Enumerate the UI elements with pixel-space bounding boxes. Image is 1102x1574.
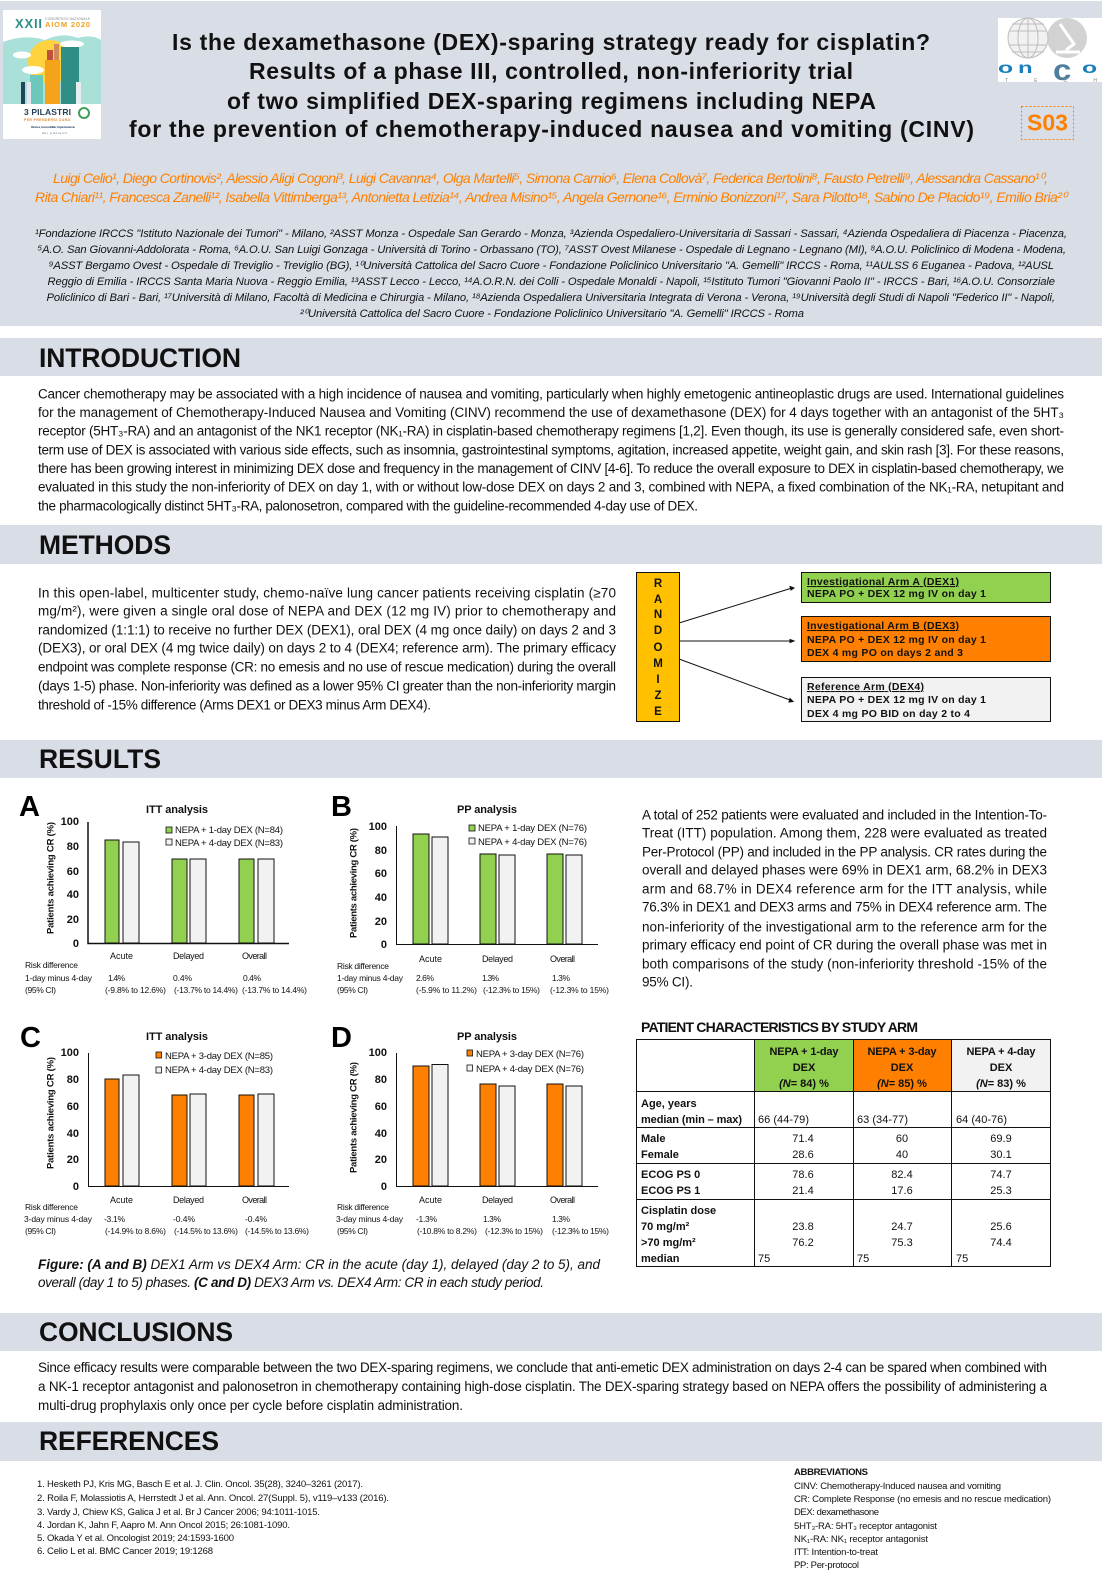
text: conclusions: multi-drug prophylaxis only once per cycle before cisplatin administration. <box>38 1398 463 1413</box>
affiliations: ²⁰Università Cattolica del Sacro Cuore - Fondazione Policlinico Universitario "A. Gemelli" IRCCS - Roma <box>300 308 804 320</box>
badge: S03 <box>1022 106 1074 140</box>
table: patient characteristics: NEPA + 1-day <box>770 1046 839 1058</box>
chart A: 1-day minus 4-day <box>25 973 93 983</box>
logo: Oncotech: T E C H <box>1005 78 1097 84</box>
chart C: -0.4% <box>245 1214 267 1224</box>
authors <box>35 170 1069 205</box>
chart A: (-13.7% to 14.4%) <box>174 985 238 995</box>
affiliations: Policlinico di Bari - Bari, ¹⁷Università di Milano, Facoltà di Medicina e Chirurgia - Milano, ¹⁸Azienda Ospedaliera Universitaria Integrata di Verona - Verona, ¹⁹Università degli Studi di Napoli "Federico II" - Napoli, <box>46 292 1055 304</box>
chart B: (95% CI) <box>337 985 368 995</box>
badge: S03: S03 <box>1027 110 1068 136</box>
box: randomize: A <box>654 594 662 606</box>
title: for the prevention of chemotherapy-induced nausea and vomiting (CINV) <box>129 116 974 142</box>
box: reference arm: DEX 4 mg PO BID on day 2 to 4 <box>807 708 970 720</box>
text: references <box>37 1479 389 1557</box>
table: patient characteristics: Cisplatin dose <box>641 1205 716 1217</box>
chart C: 3-day minus 4-day <box>24 1214 93 1224</box>
chart B: 100 <box>369 821 387 833</box>
chart A: 0.4% <box>243 973 261 983</box>
text: conclusions: a NK-1 receptor antagonist and palonosetron in chemotherapy containing high-dose cisplatin. The DEX-sparing strategy based on NEPA offers the possibility of administering a <box>38 1379 1047 1394</box>
chart D: Overall <box>550 1195 575 1205</box>
table: patient characteristics: 75 <box>857 1253 869 1265</box>
heading: introduction <box>0 338 1102 376</box>
chart A: Acute <box>110 951 133 961</box>
chart D: Patients achieving CR (%) <box>348 1062 360 1173</box>
chart C: 80 <box>67 1074 79 1086</box>
text: references: 3. Vardy J, Chiew KS, Galica J et al. Br J Cancer 2006; 94:1011-1015. <box>37 1507 320 1518</box>
chart D: D <box>331 1022 352 1054</box>
table: patient characteristics: >70 mg/m² <box>641 1237 696 1249</box>
chart A: Patients achieving CR (%) <box>46 822 56 934</box>
chart C: NEPA + 4-day DEX (N=83) <box>165 1065 273 1076</box>
text: references: 2. Roila F, Molassiotis A, Herrstedt J et al. Ann. Oncol. 27(Suppl. 5), v119–v133 (2016). <box>37 1493 389 1504</box>
heading: methods <box>0 525 1102 564</box>
table: patient characteristics: 70 mg/m² <box>641 1221 690 1233</box>
box: randomize: I <box>656 674 660 686</box>
authors: Rita Chiari¹¹, Francesca Zanelli¹², Isabella Vittimberga¹³, Antonietta Letizia¹⁴, Andrea Misino¹⁵, Angela Gernone¹⁶, Erminio Bonizzoni¹⁷, Sara Pilotto¹⁸, Sabino De Placido¹⁹, Emilio Bria²⁰ <box>35 189 1069 205</box>
table: patient characteristics: 75 <box>956 1253 968 1265</box>
chart D: (-12.3% to 15%) <box>552 1226 609 1236</box>
chart A: 100 <box>61 816 79 828</box>
text: methods: mg/m²), were given a single oral dose of NEPA and DEX (12 mg IV) prior to chemotherapy and <box>38 604 616 618</box>
chart B: PP analysis <box>457 804 517 816</box>
box: investigational arm B: DEX 4 mg PO on days 2 and 3 <box>807 647 963 659</box>
text: introduction: the pharmacologically distinct 5HT₃-RA, palonosetron, compared with the guideline-recommended 4-day use of DEX. <box>38 498 698 514</box>
box: randomize: O <box>654 642 663 654</box>
affiliations: ¹Fondazione IRCCS "Istituto Nazionale dei Tumori" - Milano, ²ASST Monza - Ospedale San Gerardo - Monza, ³Azienda Ospedaliero-Universitaria di Sassari - Sassari, ⁴Azienda Ospedaliera di Piacenza - Piacenza, <box>35 228 1067 240</box>
text: results: both comparisons of the study (non-inferiority threshold -15% of the <box>642 956 1047 972</box>
logo: AIOM 2020 congress: CONGRESSO NAZIONALE <box>45 17 91 21</box>
chart D: 100 <box>369 1047 387 1059</box>
chart C <box>20 1022 309 1236</box>
text: abbreviations: CINV: Chemotherapy-Induced nausea and vomiting <box>794 1481 1001 1492</box>
arrows: randomization <box>679 586 794 702</box>
text: abbreviations: PP: Per-protocol <box>794 1560 859 1571</box>
table: patient characteristics: 23.8 <box>792 1221 814 1233</box>
table: patient characteristics: 17.6 <box>891 1185 913 1197</box>
table: patient characteristics: 71.4 <box>792 1133 814 1145</box>
chart B: (-5.9% to 11.2%) <box>416 985 477 995</box>
logo: AIOM 2020 congress: Ricerca, Accessibilità, Organizzazione <box>31 125 75 129</box>
table: patient characteristics: 21.4 <box>792 1185 814 1197</box>
logo: Oncotech: o <box>998 59 1013 77</box>
chart A: 0.4% <box>173 973 192 983</box>
chart B: Acute <box>419 954 442 964</box>
logo: Oncotech: o <box>1082 59 1097 77</box>
affiliations: Reggio di Emilia - IRCCS Santa Maria Nuova - Reggio Emilia, ¹³ASST Lecco - Lecco, ¹⁴A.O.R.N. dei Colli - Ospedale Monaldi - Napoli, ¹⁵Istituto Tumori "Giovanni Paolo II" - IRCCS - Bari, ¹⁶A.O.U. Consorziale <box>48 276 1055 288</box>
table: patient characteristics: Female <box>641 1149 679 1161</box>
chart C: C <box>20 1022 41 1054</box>
chart B: 80 <box>375 845 387 857</box>
table: patient characteristics: Male <box>641 1133 665 1145</box>
chart A: 0 <box>73 938 79 950</box>
text: introduction: receptor (5HT₃-RA) and an antagonist of the NK1 receptor (NK₁-RA) in cisplatin-based chemotherapy regimens [1,2]. Even though, its use is generally considered safe, even short- <box>38 424 1064 438</box>
chart C: Acute <box>110 1195 133 1205</box>
chart C: 100 <box>61 1047 79 1059</box>
table: patient characteristics: ECOG PS 0 <box>641 1169 700 1181</box>
chart C: Delayed <box>173 1195 204 1205</box>
chart D: (-12.3% to 15%) <box>485 1226 543 1236</box>
chart D: 0 <box>381 1181 387 1193</box>
table: patient characteristics: DEX <box>990 1062 1013 1074</box>
table: patient characteristics: NEPA + 4-day <box>966 1046 1036 1058</box>
box: randomize: Z <box>654 690 662 702</box>
text: abbreviations: CR: Complete Response (no emesis and no rescue medication) <box>794 1494 1051 1505</box>
text: abbreviations: ITT: Intention-to-treat <box>794 1547 878 1558</box>
text: abbreviations <box>794 1467 1051 1571</box>
chart C: Patients achieving CR (%) <box>46 1057 56 1169</box>
text: results: 95% CI). <box>642 974 693 990</box>
table: patient characteristics: 69.9 <box>990 1133 1012 1145</box>
chart D: 1.3% <box>552 1214 570 1224</box>
table: patient characteristics: 75 <box>758 1253 770 1265</box>
chart A: 60 <box>67 866 79 878</box>
chart A: A <box>19 791 40 823</box>
title <box>129 29 974 142</box>
text: abbreviations: NK₁-RA: NK₁ receptor antagonist <box>794 1534 928 1545</box>
chart A: NEPA + 4-day DEX (N=83) <box>175 838 283 849</box>
chart C: Risk difference <box>25 1202 78 1212</box>
logo: AIOM 2020 congress: 3 PILASTRI <box>24 107 71 117</box>
box: investigational arm A: Investigational Arm A (DEX1) <box>807 576 959 588</box>
text: results: Treat (ITT) population. Among them, 228 were evaluated as treated <box>642 826 1047 840</box>
logo: AIOM 2020 congress: PER PRENDERSI CURA <box>24 118 70 122</box>
chart B: Patients achieving CR (%) <box>348 828 360 938</box>
text: abbreviations: ABBREVIATIONS <box>794 1467 868 1478</box>
chart C: (-14.9% to 8.6%) <box>105 1226 166 1236</box>
chart B: 40 <box>375 892 387 904</box>
chart D: NEPA + 4-day DEX (N=76) <box>476 1064 584 1075</box>
chart A: 80 <box>67 841 79 853</box>
box: investigational arm B: Investigational Arm B (DEX3) <box>807 620 959 632</box>
text: references: 6. Celio L et al. BMC Cancer 2019; 19:1268 <box>37 1546 213 1557</box>
text: abbreviations: DEX: dexamethasone <box>794 1507 879 1518</box>
table: patient characteristics: 25.3 <box>990 1185 1012 1197</box>
table: patient characteristics: 76.2 <box>792 1237 814 1249</box>
box: investigational arm B <box>802 616 1050 662</box>
panel: header <box>0 1 1102 326</box>
heading: conclusions: CONCLUSIONS <box>39 1317 233 1347</box>
chart D: NEPA + 3-day DEX (N=76) <box>476 1049 584 1060</box>
table: patient characteristics: median <box>641 1253 680 1265</box>
logo: AIOM 2020 congress <box>3 10 101 139</box>
chart B: 1.3% <box>552 973 570 983</box>
chart D: -1.3% <box>416 1214 437 1224</box>
heading: references: REFERENCES <box>39 1426 219 1456</box>
chart B: Overall <box>550 954 575 964</box>
table: patient characteristics: 66 (44-79) <box>758 1114 809 1126</box>
table: patient characteristics: (N= 84) % <box>779 1078 829 1090</box>
chart B: 2.6% <box>416 973 434 983</box>
chart B: 1.3% <box>482 973 499 983</box>
figure caption <box>38 1257 600 1290</box>
chart C: -0.4% <box>173 1214 195 1224</box>
text: conclusions <box>38 1360 1047 1413</box>
text: methods: (days 1-5) phase. Non-inferiority was defined as a lower 95% CI greater than the non-inferiority margin <box>38 678 616 694</box>
table: patient characteristics: 63 (34-77) <box>857 1114 908 1126</box>
chart B: Risk difference <box>337 961 389 971</box>
text: methods: (DEX3), or oral DEX (4 mg twice daily) on days 2 to 4 (DEX4; reference arm). The primary efficacy <box>38 640 616 656</box>
box: reference arm: NEPA PO + DEX 12 mg IV on day 1 <box>807 694 986 706</box>
affiliations: ⁹ASST Bergamo Ovest - Ospedale di Treviglio - Treviglio (BG), ¹⁰Università Cattolica del Sacro Cuore - Fondazione Policlinico Universitario "A. Gemelli" IRCCS - Roma, ¹¹AULSS 6 Euganea - Padova, ¹²AUSL <box>48 260 1054 272</box>
logo: AIOM 2020 congress: XXII <box>15 16 42 31</box>
text: methods: endpoint was complete response (CR: no emesis and no use of rescue medication) during the overall <box>38 660 616 674</box>
heading: introduction: INTRODUCTION <box>39 343 241 373</box>
affiliations: ⁵A.O. San Giovanni-Addolorata - Roma, ⁶A.O.U. San Luigi Gonzaga - Università di Torino - Orbassano (TO), ⁷ASST Ovest Milanese - Ospedale di Legnano - Legnano (MI), ⁸A.O.U. Policlinico di Modena - Modena, <box>38 244 1066 256</box>
chart D: PP analysis <box>457 1031 517 1043</box>
chart B: 20 <box>375 916 387 928</box>
chart B: 60 <box>375 868 387 880</box>
chart C: NEPA + 3-day DEX (N=85) <box>165 1051 273 1062</box>
box: randomize <box>636 572 680 722</box>
table: patient characteristics: (N= 85) % <box>877 1078 927 1090</box>
heading: methods: METHODS <box>39 530 171 560</box>
affiliations <box>35 228 1067 320</box>
table: patient characteristics: 82.4 <box>891 1169 913 1181</box>
chart C: (-14.5% to 13.6%) <box>245 1226 309 1236</box>
logo: Oncotech <box>998 18 1102 87</box>
chart B: B <box>331 791 352 823</box>
text: results: primary efficacy end point of CR during the overall phase was met in <box>642 938 1047 952</box>
table: patient characteristics: 78.6 <box>792 1169 814 1181</box>
text: introduction: for the management of Chemotherapy-Induced Nausea and Vomiting (CINV) recommend the use of dexamethasone (DEX) for 4 days together with an antagonist of the 5HT₃ <box>38 405 1064 420</box>
chart D: (-10.8% to 8.2%) <box>417 1226 477 1236</box>
table: patient characteristics: median (min – max) <box>641 1114 742 1126</box>
table: patient characteristics: 30.1 <box>990 1149 1012 1161</box>
logo: Oncotech: n <box>1018 60 1033 77</box>
chart C: 0 <box>73 1181 79 1193</box>
chart D: Delayed <box>482 1195 513 1205</box>
chart A: Overall <box>242 951 267 961</box>
chart D: 20 <box>375 1154 387 1166</box>
table: patient characteristics: 40 <box>896 1149 908 1161</box>
box: randomize: E <box>654 706 662 718</box>
text: introduction: term use of DEX is associated with various side effects, such as insomnia, gastrointestinal symptoms, agitation, increased appetite, weight gain, and skin rash [3]. For these reasons, <box>38 442 1064 458</box>
table: patient characteristics: 75.3 <box>891 1237 913 1249</box>
logo: AIOM 2020 congress: AIOM 2020 <box>45 20 90 29</box>
text: methods: randomized (1:1:1) to receive no further DEX (DEX1), oral DEX (4 mg once daily) on days 2 and 3 <box>38 622 616 638</box>
table: patient characteristics <box>636 1019 1051 1267</box>
chart C: ITT analysis <box>146 1031 208 1043</box>
text: results: non-inferiority of the investigational arm to the reference arm for the <box>642 920 1047 934</box>
box: investigational arm A <box>802 572 1050 602</box>
chart C: Overall <box>242 1195 267 1205</box>
chart A: (-13.7% to 14.4%) <box>242 985 307 995</box>
box: randomize: M <box>653 658 663 670</box>
text: results: arm and 68.7% in DEX4 reference arm for the ITT analysis, while <box>642 882 1047 896</box>
text: introduction: evaluated in this study the non-inferiority of DEX on day 1, with or without low-dose DEX on days 2 and 3, combined with NEPA, a fixed combination of the NK₁-RA, netupitant and <box>38 480 1064 494</box>
chart C: 60 <box>67 1101 79 1113</box>
chart D: 3-day minus 4-day <box>336 1214 404 1224</box>
box: investigational arm B: NEPA PO + DEX 12 mg IV on day 1 <box>807 634 986 646</box>
chart D <box>331 1022 609 1236</box>
logo: AIOM 2020 congress: dei pazienti <box>42 131 67 135</box>
table: patient characteristics: 25.6 <box>990 1221 1012 1233</box>
text: conclusions: Since efficacy results were comparable between the two DEX-sparing regimens, we conclude that anti-emetic DEX administration on days 2-4 can be spared when combined with <box>38 1360 1047 1375</box>
chart D: 80 <box>375 1074 387 1086</box>
table title: PATIENT CHARACTERISTICS BY STUDY ARM <box>641 1019 918 1035</box>
table: patient characteristics: 74.4 <box>990 1237 1012 1249</box>
table: patient characteristics: 60 <box>896 1133 908 1145</box>
chart B: NEPA + 4-day DEX (N=76) <box>478 837 587 848</box>
box: reference arm <box>802 678 1050 722</box>
text: results: overall and delayed phases were 69% in DEX1 arm, 68.2% in DEX3 <box>642 862 1047 878</box>
heading: references <box>0 1422 1102 1461</box>
chart A <box>19 791 307 995</box>
table: patient characteristics: 74.7 <box>990 1169 1012 1181</box>
text: results: 76.3% in DEX1 and DEX3 arms and 75% in DEX4 reference arm. The <box>642 900 1047 914</box>
table: patient characteristics: Age, years <box>641 1098 697 1110</box>
chart C: -3.1% <box>104 1214 125 1224</box>
chart A: (-9.8% to 12.6%) <box>105 985 166 995</box>
chart D: 60 <box>375 1101 387 1113</box>
heading: results: RESULTS <box>39 744 161 774</box>
text: references: 1. Hesketh PJ, Kris MG, Basch E et al. J. Clin. Oncol. 35(28), 3240–3261 (2017). <box>37 1479 363 1490</box>
table: patient characteristics: ECOG PS 1 <box>641 1185 700 1197</box>
text: methods <box>38 586 616 712</box>
text: results: A total of 252 patients were evaluated and included in the Intention-To- <box>642 808 1047 822</box>
chart A: NEPA + 1-day DEX (N=84) <box>175 825 283 836</box>
text: results: Per-Protocol (PP) and included in the PP analysis. CR rates during the <box>642 844 1047 860</box>
chart B: (-12.3% to 15%) <box>550 985 609 995</box>
chart B: (-12.3% to 15%) <box>483 985 540 995</box>
box: investigational arm A: NEPA PO + DEX 12 mg IV on day 1 <box>807 588 986 600</box>
authors: Luigi Celio¹, Diego Cortinovis², Alessio Aligi Cogoni³, Luigi Cavanna⁴, Olga Martelli⁵, Simona Carnio⁶, Elena Collovà⁷, Federica Bertolini⁸, Fausto Petrelli⁹, Alessandra Cassano¹⁰, <box>53 170 1048 186</box>
chart C: (95% CI) <box>25 1226 56 1236</box>
box: randomize: D <box>654 625 662 637</box>
box: reference arm: Reference Arm (DEX4) <box>807 681 924 693</box>
table: patient characteristics: 28.6 <box>792 1149 814 1161</box>
text: references: 4. Jordan K, Jahn F, Aapro M. Ann Oncol 2015; 26:1081-1090. <box>37 1520 290 1531</box>
title: Is the dexamethasone (DEX)-sparing strategy ready for cisplatin? <box>172 29 930 55</box>
chart B: 1-day minus 4-day <box>337 973 404 983</box>
text: introduction: there has been growing interest in minimizing DEX dose and frequency in the management of CINV [4-6]. To reduce the overall exposure to DEX in cisplatin-based chemotherapy, we <box>38 461 1064 476</box>
text: methods: In this open-label, multicenter study, chemo-naïve lung cancer patients receiving cisplatin (≥70 <box>38 586 616 600</box>
chart D: 40 <box>375 1128 387 1140</box>
table: patient characteristics: DEX <box>891 1062 914 1074</box>
chart A: Risk difference <box>25 960 78 970</box>
chart D: (95% CI) <box>337 1226 368 1236</box>
text: references: 5. Okada Y et al. Oncologist 2019; 24:1593-1600 <box>37 1533 234 1544</box>
chart C: 40 <box>67 1128 79 1140</box>
chart A: 20 <box>67 914 79 926</box>
figure caption: overall (day 1 to 5) phases. (C and D) DEX3 Arm vs. DEX4 Arm: CR in each study period. <box>38 1275 544 1290</box>
chart B: 0 <box>381 939 387 951</box>
text: introduction <box>38 386 1064 514</box>
chart D: Risk difference <box>337 1202 389 1212</box>
text: abbreviations: 5HT₃-RA: 5HT₃ receptor antagonist <box>794 1521 937 1532</box>
table: patient characteristics: 64 (40-76) <box>956 1114 1007 1126</box>
chart A: 1.4% <box>108 973 125 983</box>
logo: Oncotech: c <box>1053 52 1071 87</box>
title: Results of a phase III, controlled, non-inferiority trial <box>249 58 853 84</box>
heading: conclusions <box>0 1313 1102 1351</box>
text: results <box>642 808 1047 990</box>
table: patient characteristics: 24.7 <box>891 1221 913 1233</box>
box: randomize: N <box>654 609 662 621</box>
chart C: 20 <box>67 1154 79 1166</box>
chart A: ITT analysis <box>146 804 208 816</box>
text: methods: threshold of -15% difference (Arms DEX1 or DEX3 minus Arm DEX4). <box>38 698 431 712</box>
chart D: 1.3% <box>483 1214 501 1224</box>
figure caption: Figure: (A and B) DEX1 Arm vs DEX4 Arm: CR in the acute (day 1), delayed (day 2 to 5), and <box>38 1257 600 1272</box>
heading: results <box>0 740 1102 778</box>
chart C: (-14.5% to 13.6%) <box>174 1226 238 1236</box>
text: introduction: Cancer chemotherapy may be associated with a high incidence of nausea and vomiting, particularly when highly emetogenic antineoplastic drugs are used. International guidelines <box>38 386 1064 402</box>
chart B <box>331 791 609 995</box>
chart D: Acute <box>419 1195 442 1205</box>
chart A: Delayed <box>173 951 204 961</box>
title: of two simplified DEX-sparing regimens including NEPA <box>227 88 876 114</box>
table: patient characteristics: DEX <box>793 1062 816 1074</box>
box: randomize: R <box>654 578 663 590</box>
table: patient characteristics: NEPA + 3-day <box>868 1046 937 1058</box>
chart A: 40 <box>67 889 79 901</box>
chart A: (95% CI) <box>25 985 56 995</box>
table: patient characteristics: (N= 83) % <box>976 1078 1026 1090</box>
chart B: Delayed <box>482 954 513 964</box>
chart B: NEPA + 1-day DEX (N=76) <box>478 823 587 834</box>
